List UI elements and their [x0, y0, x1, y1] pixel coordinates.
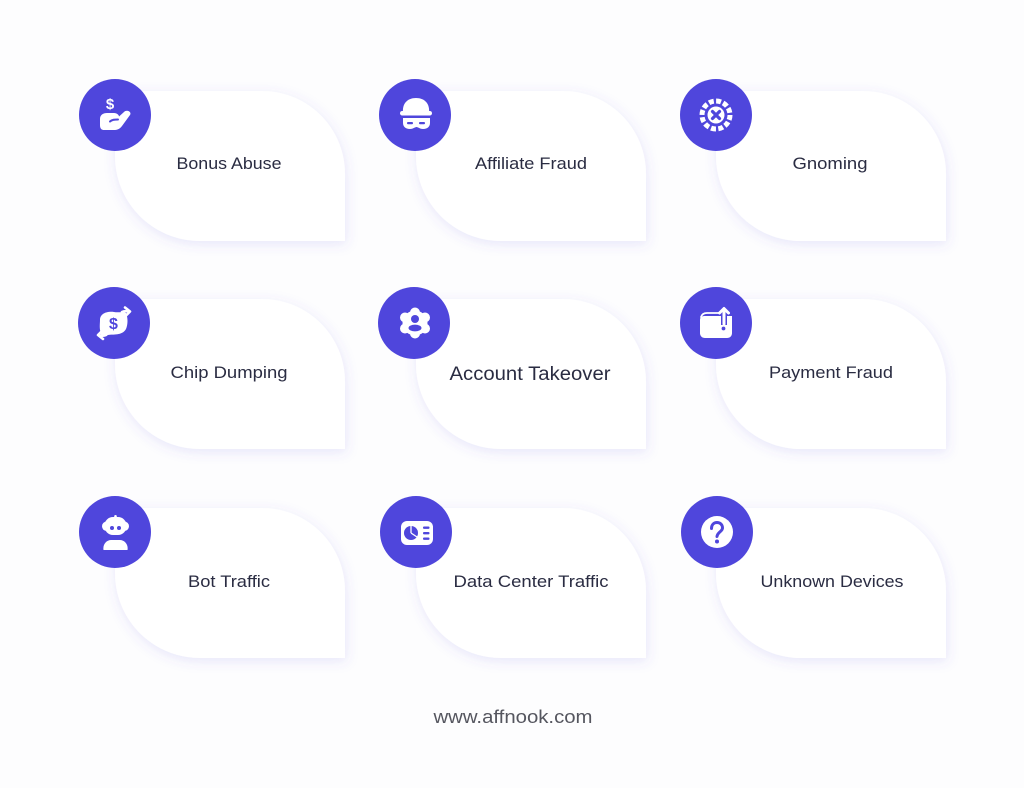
label: Bot Traffic: [188, 572, 271, 591]
icon badge: hand with dollar: $: [106, 96, 115, 113]
label: Unknown Devices: [760, 572, 904, 591]
icon badge: question mark: [681, 496, 753, 568]
card: Unknown Devices: [681, 496, 946, 658]
card: Payment Fraud: [680, 287, 946, 449]
card: Affiliate Fraud: [379, 79, 646, 241]
icon badge: dollar exchange: $: [109, 316, 118, 333]
card: Bonus Abuse: [79, 79, 345, 241]
card: Gnoming: [680, 79, 946, 241]
icon badge: wallet with up arrow: [680, 287, 752, 359]
label: Gnoming: [792, 154, 868, 173]
card: Bot Traffic: [79, 496, 345, 658]
icon badge: hand with dollar: [79, 79, 151, 151]
card: Account Takeover: [378, 287, 646, 449]
card: Data Center Traffic: [380, 496, 646, 658]
label: Data Center Traffic: [454, 572, 609, 591]
label: Chip Dumping: [170, 363, 288, 382]
icon badge: roulette wheel: [680, 79, 752, 151]
icon badge: masked figure: [379, 79, 451, 151]
icon badge: dashboard panel: [380, 496, 452, 568]
label: Account Takeover: [450, 364, 611, 385]
label: Bonus Abuse: [176, 154, 282, 173]
footer website url: www.affnook.com: [432, 707, 592, 727]
icon badge: dollar exchange: [78, 287, 150, 359]
label: Affiliate Fraud: [475, 154, 587, 173]
icon badge: user in rounded hexagon: [378, 287, 450, 359]
label: Payment Fraud: [769, 363, 893, 382]
card: Chip Dumping: [78, 287, 345, 449]
icon badge: robot: [79, 496, 151, 568]
